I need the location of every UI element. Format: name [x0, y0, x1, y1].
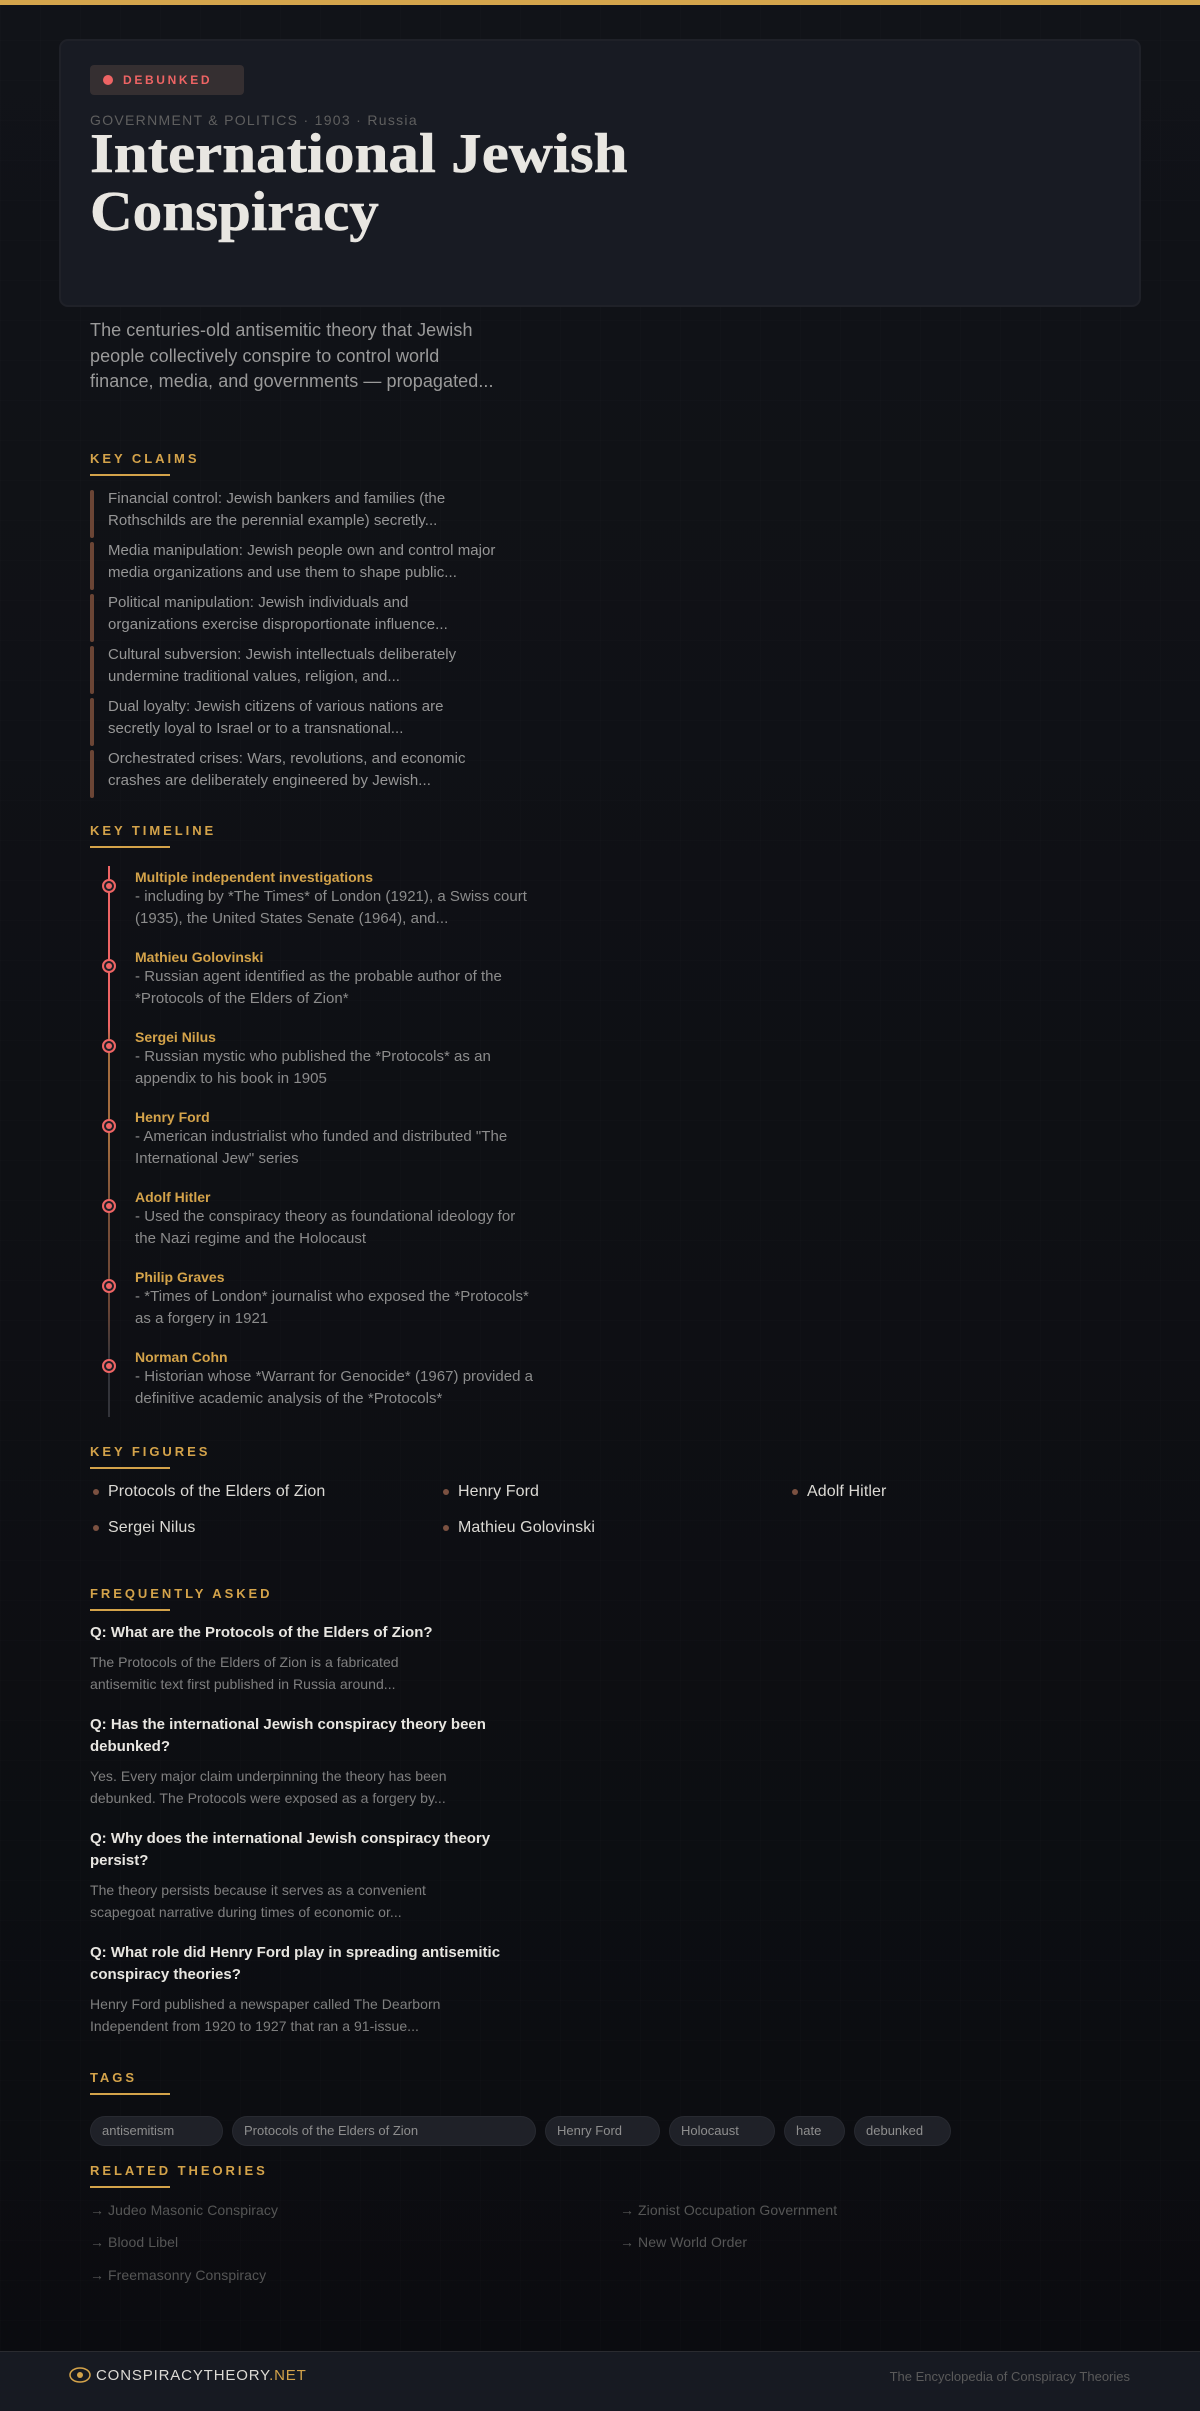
title: International Jewish — [90, 123, 628, 185]
claim 2: Media manipulation: Jewish people own and control major — [108, 542, 495, 559]
intro paragraph: finance, media, and governments — propagated... — [90, 371, 494, 391]
claim 6: crashes are deliberately engineered by Jewish... — [108, 772, 431, 789]
claim 5: secretly loyal to Israel or to a transnational... — [108, 720, 403, 737]
event: Henry Ford: Henry Ford — [135, 1109, 210, 1125]
event: Adolf Hitler: - Used the conspiracy theory as foundational ideology for — [135, 1208, 515, 1225]
badge: debunked — [90, 65, 244, 95]
event: Philip Graves: - *Times of London* journalist who exposed the *Protocols* — [135, 1288, 529, 1305]
event: Multiple independent investigations: (1935), the United States Senate (1964), and... — [135, 910, 448, 927]
faq 3 — [90, 1830, 490, 1920]
top accent bar — [0, 0, 1200, 5]
event: Adolf Hitler — [102, 1189, 515, 1247]
event: Henry Ford: - American industrialist who funded and distributed "The — [135, 1128, 507, 1145]
tag — [784, 2116, 845, 2146]
tag — [90, 2116, 223, 2146]
icon: eye logo — [69, 2367, 91, 2383]
faq 1: Q: What are the Protocols of the Elders of Zion? — [90, 1624, 433, 1641]
heading: key figures: KEY FIGURES — [90, 1444, 210, 1459]
faq 3: Q: Why does the international Jewish conspiracy theory — [90, 1830, 490, 1847]
tagline: The Encyclopedia of Conspiracy Theories — [890, 2369, 1130, 2384]
tag — [854, 2116, 951, 2146]
timeline line — [108, 866, 110, 1417]
event: Philip Graves: as a forgery in 1921 — [135, 1310, 268, 1327]
event: Norman Cohn — [102, 1349, 533, 1407]
heading: key claims: KEY CLAIMS — [90, 451, 199, 466]
event: Norman Cohn: definitive academic analysis of the *Protocols* — [135, 1390, 442, 1407]
tag — [232, 2116, 536, 2146]
faq 2: Q: Has the international Jewish conspiracy theory been — [90, 1716, 486, 1733]
faq 1 — [90, 1624, 433, 1692]
event: Sergei Nilus: appendix to his book in 1905 — [135, 1070, 327, 1087]
tag: Henry Ford — [557, 2123, 622, 2138]
claim 2: media organizations and use them to shape public... — [108, 564, 457, 581]
list: related theories — [90, 2202, 837, 2283]
claim 1: Financial control: Jewish bankers and families (the — [108, 490, 445, 507]
event: Philip Graves — [102, 1269, 529, 1327]
intro paragraph: The centuries-old antisemitic theory that Jewish — [90, 320, 473, 340]
related link: → Judeo Masonic Conspiracy — [90, 2202, 278, 2218]
faq 2: Yes. Every major claim underpinning the theory has been — [90, 1768, 447, 1784]
event: Mathieu Golovinski — [102, 949, 502, 1007]
event: Sergei Nilus: - Russian mystic who published the *Protocols* as an — [135, 1048, 491, 1065]
faq 2 — [90, 1716, 486, 1806]
related link: → Blood Libel — [90, 2234, 178, 2250]
event: Mathieu Golovinski: *Protocols of the Elders of Zion* — [135, 990, 349, 1007]
claim 1 — [90, 490, 445, 538]
event: Mathieu Golovinski: - Russian agent identified as the probable author of the — [135, 968, 502, 985]
faq 1: antisemitic text first published in Russia around... — [90, 1676, 396, 1692]
claim 2 — [90, 542, 496, 590]
claim 3 — [90, 594, 448, 642]
event: Philip Graves: Philip Graves — [135, 1269, 224, 1285]
heading: related theories: RELATED THEORIES — [90, 2163, 268, 2178]
claim 6: Orchestrated crises: Wars, revolutions, and economic — [108, 750, 466, 767]
faq 3: persist? — [90, 1852, 148, 1869]
faq 4: Henry Ford published a newspaper called The Dearborn — [90, 1996, 440, 2012]
tag list — [90, 2116, 951, 2146]
figure: Sergei Nilus — [108, 1519, 195, 1536]
figure: Protocols of the Elders of Zion — [108, 1483, 325, 1500]
figure: Adolf Hitler — [807, 1483, 886, 1500]
panel: hero card — [59, 39, 1141, 307]
list: key claims — [90, 490, 496, 798]
tag — [669, 2116, 775, 2146]
event: Multiple independent investigations: - including by *The Times* of London (1921), a Swiss court — [135, 888, 527, 905]
event: Adolf Hitler: Adolf Hitler — [135, 1189, 210, 1205]
tag: Holocaust — [681, 2123, 739, 2138]
tag: antisemitism — [102, 2123, 174, 2138]
event: Adolf Hitler: the Nazi regime and the Holocaust — [135, 1230, 366, 1247]
tag — [545, 2116, 660, 2146]
event: Multiple independent investigations — [102, 869, 527, 927]
badge: debunked: DEBUNKED — [123, 73, 212, 87]
claim 4: Cultural subversion: Jewish intellectuals deliberately — [108, 646, 456, 663]
faq 2: debunked. The Protocols were exposed as a forgery by... — [90, 1790, 446, 1806]
tag: hate — [796, 2123, 821, 2138]
logo wordmark: CONSPIRACYTHEORY.NET — [96, 2367, 307, 2384]
figure: Henry Ford — [458, 1483, 539, 1500]
claim 4: undermine traditional values, religion, and... — [108, 668, 400, 685]
faq 3: scapegoat narrative during times of economic or... — [90, 1904, 402, 1920]
intro paragraph: people collectively conspire to control world — [90, 346, 439, 366]
claim 5 — [90, 698, 444, 746]
faq 4 — [90, 1944, 500, 2034]
event: Henry Ford: International Jew" series — [135, 1150, 299, 1167]
faq 2: debunked? — [90, 1738, 170, 1755]
faq 4: Independent from 1920 to 1927 that ran a 91-issue... — [90, 2018, 419, 2034]
tag: Protocols of the Elders of Zion — [244, 2123, 418, 2138]
event: Norman Cohn: Norman Cohn — [135, 1349, 228, 1365]
event: Sergei Nilus — [102, 1029, 491, 1087]
event: Norman Cohn: - Historian whose *Warrant for Genocide* (1967) provided a — [135, 1368, 533, 1385]
faq 1: The Protocols of the Elders of Zion is a fabricated — [90, 1654, 399, 1670]
related link: → Freemasonry Conspiracy — [90, 2267, 266, 2283]
event: Multiple independent investigations: Multiple independent investigations — [135, 869, 373, 885]
category and date line: GOVERNMENT & POLITICS · 1903 · Russia — [90, 112, 418, 128]
claim 6 — [90, 750, 466, 798]
claim 4 — [90, 646, 456, 694]
heading: key timeline: KEY TIMELINE — [90, 823, 216, 838]
faq 4: conspiracy theories? — [90, 1966, 241, 1983]
figure: Mathieu Golovinski — [458, 1519, 595, 1536]
event: Sergei Nilus: Sergei Nilus — [135, 1029, 216, 1045]
claim 5: Dual loyalty: Jewish citizens of various nations are — [108, 698, 444, 715]
footer — [0, 2351, 1200, 2411]
claim 3: organizations exercise disproportionate influence... — [108, 616, 448, 633]
claim 3: Political manipulation: Jewish individuals and — [108, 594, 408, 611]
heading: tags: TAGS — [90, 2070, 137, 2085]
related link: → New World Order — [620, 2234, 747, 2250]
title — [90, 123, 628, 243]
title: Conspiracy — [90, 181, 379, 243]
event: Mathieu Golovinski: Mathieu Golovinski — [135, 949, 263, 965]
list: key figures — [93, 1483, 886, 1536]
intro paragraph — [90, 320, 494, 391]
related link: → Zionist Occupation Government — [620, 2202, 837, 2218]
event: Henry Ford — [102, 1109, 507, 1167]
faq 4: Q: What role did Henry Ford play in spreading antisemitic — [90, 1944, 500, 1961]
tag: debunked — [866, 2123, 923, 2138]
timeline — [102, 866, 533, 1417]
faq 3: The theory persists because it serves as a convenient — [90, 1882, 426, 1898]
claim 1: Rothschilds are the perennial example) secretly... — [108, 512, 437, 529]
heading: frequently asked: FREQUENTLY ASKED — [90, 1586, 273, 1601]
